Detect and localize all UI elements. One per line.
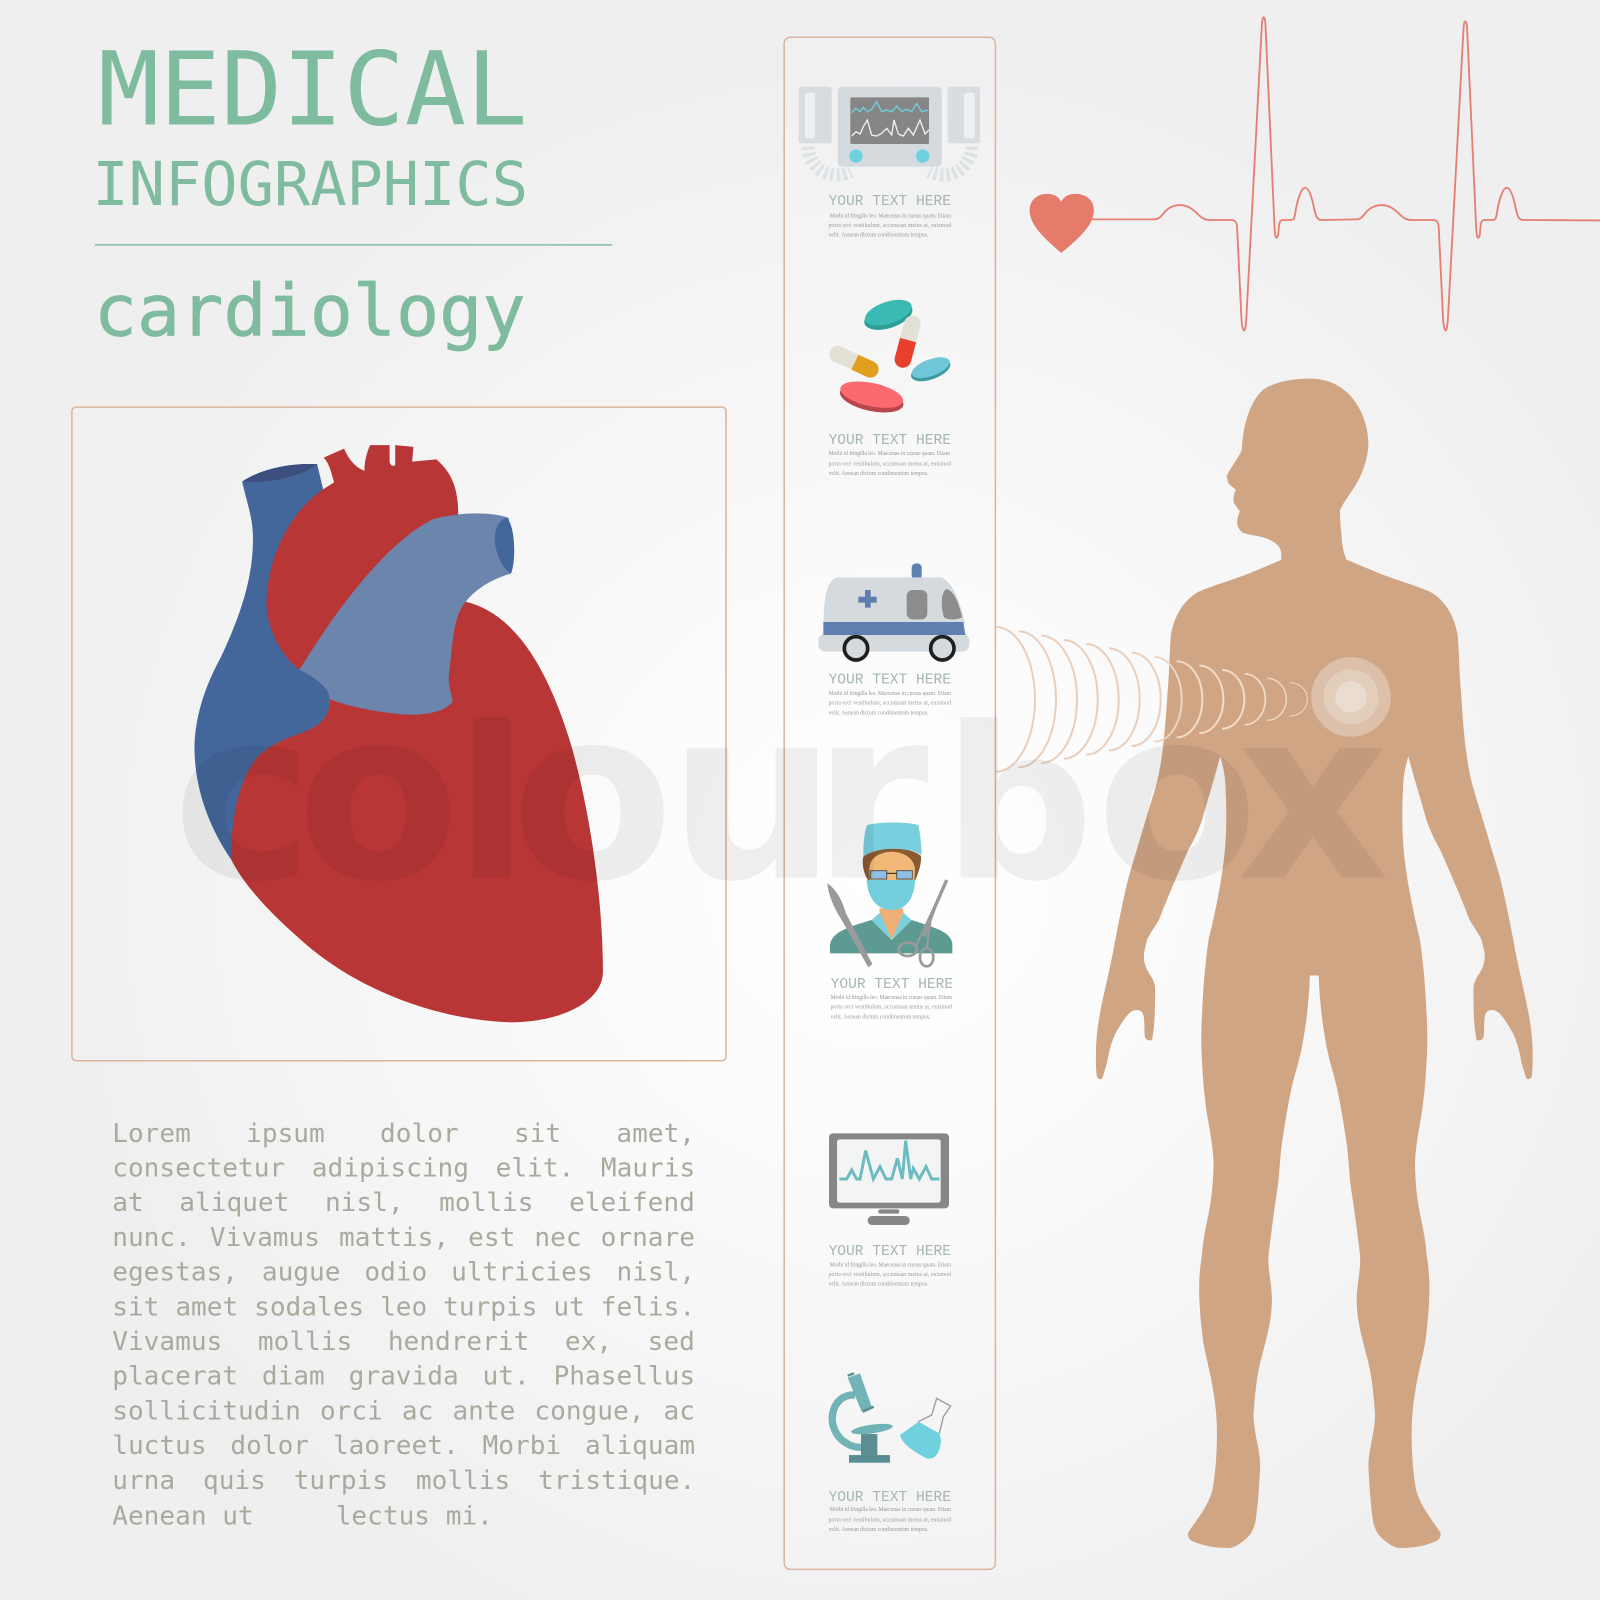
watermark: o	[297, 658, 460, 934]
right atrium lobe	[277, 670, 330, 730]
body text: luctus dolor laoreet. Morbi aliquam	[112, 1431, 695, 1461]
text block 1: porta orci vestibulum, accumsan metus at, euismod	[829, 223, 951, 229]
pulmonary artery opening	[495, 518, 514, 573]
icon: small heart	[1030, 194, 1094, 253]
signal waves from heart to column	[996, 627, 1307, 772]
text block 2: velit. Aenean dictum condimentum tempus.	[829, 471, 929, 477]
body text	[112, 1119, 695, 1531]
icon: ambulance	[818, 563, 969, 660]
text block 3: Morbi id fringilla leo. Maecenas in cursus quam. Etiam	[829, 690, 952, 697]
text block 2: YOUR TEXT HERE	[829, 433, 951, 449]
text block 4: porta orci vestibulum, accumsan metus at, euismod	[831, 1005, 952, 1011]
vena cava	[194, 464, 364, 860]
text block 1: Morbi id fringilla leo. Maecenas in cursus quam. Etiam	[830, 212, 952, 219]
watermark: l	[455, 682, 528, 928]
aorta	[266, 445, 458, 670]
head and neck	[1227, 379, 1368, 563]
body text: consectetur adipiscing elit. Mauris	[112, 1154, 695, 1184]
text block 5: velit. Aenean dictum condimentum tempus.	[829, 1282, 929, 1288]
icon: surgeon	[827, 823, 952, 967]
text block 4: velit. Aenean dictum condimentum tempus.	[831, 1014, 931, 1020]
text block 1: velit. Aenean dictum condimentum tempus.	[829, 233, 929, 239]
icon: patient monitor	[799, 87, 980, 175]
subtitle: cardiology: cardiology	[94, 270, 526, 353]
watermark: c	[172, 658, 313, 934]
text block 3	[829, 673, 952, 716]
text block 4	[831, 977, 953, 1020]
text block 5: porta orci vestibulum, accumsan metus at, euismod	[829, 1272, 951, 1278]
watermark: b	[943, 682, 1094, 928]
panel: heart frame	[72, 407, 726, 1061]
text block 6: velit. Aenean dictum condimentum tempus.	[829, 1527, 929, 1533]
icon: pills	[827, 295, 953, 417]
left ventricle	[231, 602, 603, 1022]
icon: computer monitor	[829, 1133, 949, 1225]
title block	[92, 30, 612, 353]
vena cava opening	[242, 464, 317, 482]
watermark: o	[511, 658, 674, 934]
text block 2: porta orci vestibulum, accumsan metus at, euismod	[829, 461, 951, 467]
body text: sit amet sodales leo turpis ut felis.	[112, 1292, 695, 1322]
body text: Aenean ut	[112, 1501, 254, 1531]
body text: placerat diam gravida ut. Phasellus	[112, 1362, 695, 1392]
text block 6: porta orci vestibulum, accumsan metus at, euismod	[829, 1517, 951, 1523]
text block 6	[829, 1490, 952, 1533]
text block 5	[829, 1244, 952, 1288]
watermark: r	[812, 658, 929, 934]
human body	[1096, 379, 1533, 1548]
watermark: x	[1237, 658, 1389, 934]
icon: microscope and flask	[832, 1373, 951, 1463]
text block 1	[829, 194, 952, 239]
text block 4: Morbi id fringilla leo. Maecenas in cursus quam. Etiam	[831, 994, 953, 1001]
watermark: u	[668, 658, 837, 934]
text block 1: YOUR TEXT HERE	[829, 194, 951, 210]
text block 5: YOUR TEXT HERE	[829, 1244, 951, 1260]
body text: Vivamus mollis hendrerit ex, sed	[112, 1327, 695, 1357]
text block 2: Morbi id fringilla leo. Maecenas in cursus quam. Etiam	[829, 450, 951, 457]
body text: Lorem ipsum dolor sit amet,	[112, 1119, 695, 1149]
text block 3: YOUR TEXT HERE	[829, 673, 951, 689]
body text: urna quis turpis mollis tristique.	[112, 1466, 695, 1496]
body text: at aliquet nisl, mollis eleifend	[112, 1188, 695, 1218]
body text: sollicitudin orci ac ante congue, ac	[112, 1396, 695, 1426]
text block 6: YOUR TEXT HERE	[829, 1490, 951, 1506]
ecg line	[1092, 17, 1600, 331]
text block 2	[829, 433, 951, 477]
pulmonary artery	[299, 513, 511, 715]
title: medical: MEDICAL	[98, 30, 528, 149]
text block 3: porta orci vestibulum, accumsan metus at, euismod	[829, 701, 951, 707]
subtitle: infographics: INFOGRAPHICS	[92, 150, 528, 220]
watermark: o	[1096, 658, 1259, 934]
body text: lectus mi.	[336, 1501, 493, 1531]
body text: egestas, augue odio ultricies nisl,	[112, 1258, 695, 1288]
text block 4: YOUR TEXT HERE	[831, 977, 953, 993]
heart illustration	[194, 445, 603, 1022]
body text: nunc. Vivamus mattis, est nec ornare	[112, 1223, 695, 1253]
left half of torso	[1096, 551, 1316, 1548]
text block 6: Morbi id fringilla leo. Maecenas in cursus quam. Etiam	[830, 1506, 952, 1513]
text block 3: velit. Aenean dictum condimentum tempus.	[829, 710, 929, 716]
heart location glow	[1311, 657, 1391, 737]
panel: services column	[784, 37, 995, 1569]
text block 5: Morbi id fringilla leo. Maecenas in cursus quam. Etiam	[830, 1261, 952, 1268]
right half of torso	[1312, 551, 1533, 1548]
